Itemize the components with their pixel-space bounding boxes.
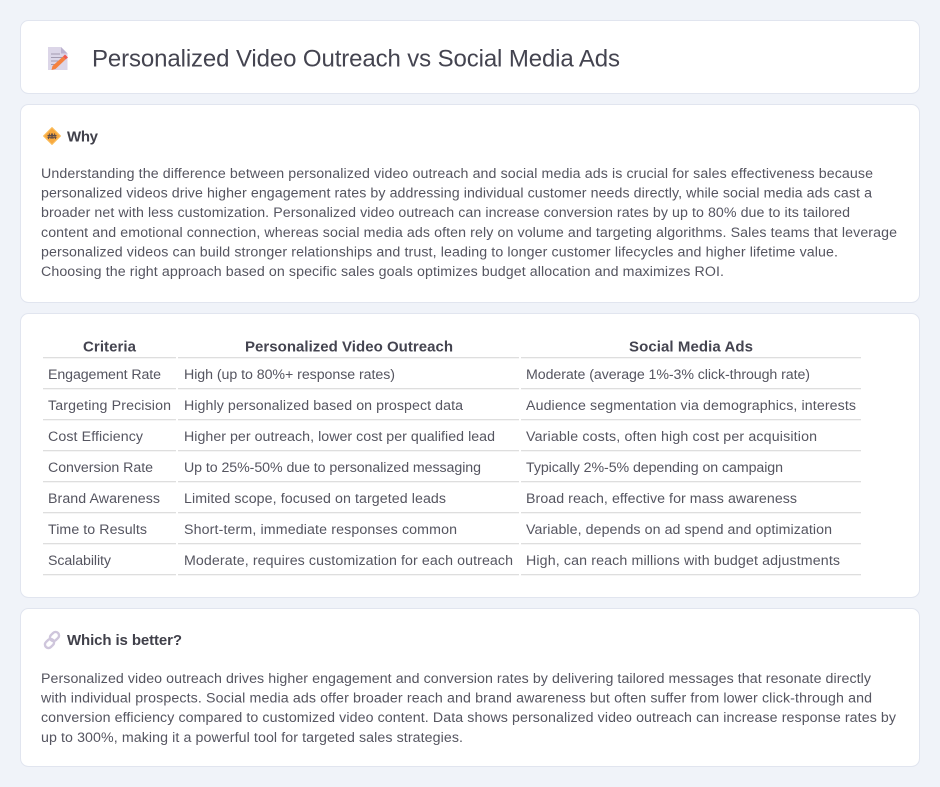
text block: which is better paragraph: conversion efficiency compared to customized video content. Data shows personalized video outreach can increase response rates by (41, 710, 897, 726)
text block: why paragraph: Choosing the right approach based on specific sales goals optimizes budget allocation and maximizes ROI. (41, 264, 724, 280)
table header row: Criteria (83, 339, 137, 356)
table row: conversion rate: Up to 25%-50% due to personalized messaging (184, 460, 481, 476)
table row: conversion rate: Typically 2%-5% depending on campaign (526, 460, 783, 476)
heading: why: Why (67, 129, 99, 146)
table row: brand awareness: Broad reach, effective for mass awareness (526, 491, 797, 507)
text block: why paragraph: Understanding the difference between personalized video outreach and social media ads is crucial for sales effectiveness because (41, 166, 873, 182)
table row: conversion rate (43, 460, 861, 482)
table row: brand awareness: Limited scope, focused on targeted leads (184, 491, 446, 507)
text block: which is better paragraph: Personalized video outreach drives higher engagement and conversion rates by delivering tailored messages that resonate directly (41, 671, 872, 687)
title: Personalized Video Outreach vs Social Media Ads (92, 46, 620, 72)
icon: orange diamond sign (44, 128, 60, 144)
table row: scalability: High, can reach millions with budget adjustments (526, 553, 840, 569)
table row: cost efficiency (43, 429, 861, 451)
table row: targeting precision: Highly personalized based on prospect data (184, 398, 463, 414)
table row: time to results: Short-term, immediate responses common (184, 522, 457, 538)
icon: document with pencil (48, 47, 68, 70)
table row: scalability (43, 553, 861, 575)
table row: cost efficiency: Variable costs, often high cost per acquisition (526, 429, 817, 445)
text block: why paragraph: content and emotional connection, whereas social media ads often rely on volume and targeting algorithms. Sales teams that leverage (41, 225, 897, 241)
text block: why paragraph (41, 166, 897, 280)
table row: scalability: Scalability (48, 553, 112, 569)
table row: targeting precision: Targeting Precision (48, 398, 171, 414)
table row: engagement rate: Engagement Rate (48, 367, 161, 383)
table row: targeting precision: Audience segmentation via demographics, interests (526, 398, 856, 414)
panel: title header (20, 20, 920, 94)
table header row: Social Media Ads (629, 339, 753, 356)
panel: which is better (20, 608, 920, 766)
text block: why paragraph: personalized videos can build stronger relationships and trust, leading to longer customer lifecycles and higher lifetime value. (41, 244, 838, 260)
text block: which is better paragraph: up to 300%, making it a powerful tool for targeted sales strategies. (41, 730, 463, 746)
table row: targeting precision (43, 398, 861, 420)
table row: cost efficiency: Cost Efficiency (48, 429, 144, 445)
icon: chain link (43, 630, 61, 650)
table header row: Personalized Video Outreach (245, 339, 453, 356)
table row: brand awareness (43, 491, 861, 513)
text block: which is better paragraph (40, 671, 897, 746)
text block: which is better paragraph: with individual prospects. Social media ads offer broader reach and brand awareness but often suffer from lower click-through and (40, 691, 872, 707)
table row: brand awareness: Brand Awareness (48, 491, 160, 507)
table row: time to results: Variable, depends on ad spend and optimization (526, 522, 832, 538)
text block: why paragraph: broader net with less customization. Personalized video outreach can increase conversion rates by up to 80% due to its tailored (41, 205, 850, 221)
heading: which is better: Which is better? (67, 632, 182, 649)
table row: scalability: Moderate, requires customization for each outreach (184, 553, 513, 569)
table header row (43, 339, 861, 358)
table row: engagement rate: High (up to 80%+ response rates) (184, 367, 395, 383)
table row: engagement rate (43, 367, 861, 389)
table row: cost efficiency: Higher per outreach, lower cost per qualified lead (184, 429, 495, 445)
table row: time to results (43, 522, 861, 544)
text block: why paragraph: personalized videos drive higher engagement rates by addressing individual customer needs directly, while social media ads cast a (41, 186, 872, 202)
panel: why (20, 104, 920, 302)
panel: comparison table (20, 314, 920, 598)
table row: time to results: Time to Results (48, 522, 147, 538)
table row: conversion rate: Conversion Rate (48, 460, 153, 476)
table row: engagement rate: Moderate (average 1%-3% click-through rate) (526, 367, 810, 383)
